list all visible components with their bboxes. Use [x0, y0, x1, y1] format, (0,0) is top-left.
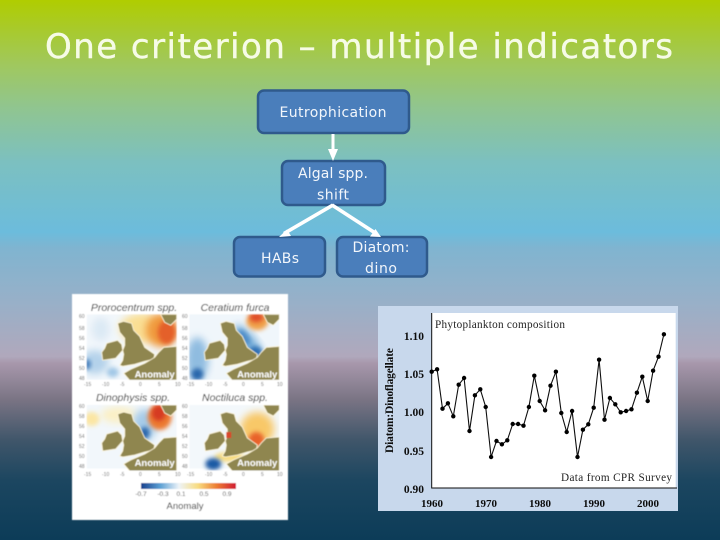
map axis labels: 0: [139, 472, 142, 478]
map titles: Ceratium furca: [201, 302, 270, 314]
box: Diatom:dino: [337, 237, 427, 277]
map axis labels: 10: [277, 472, 283, 478]
panel: anomaly maps: [72, 294, 288, 520]
map axis labels: 10: [175, 382, 181, 388]
box: Algal spp. shift: shift: [317, 188, 350, 204]
map axis labels: -15: [84, 382, 91, 388]
map axis labels: 50: [79, 454, 85, 460]
map axis labels: 54: [182, 346, 188, 352]
panel: phytoplankton line chart: [378, 306, 678, 511]
x axis ticks: 1990: [583, 498, 606, 510]
x axis ticks: [421, 498, 660, 510]
map axis labels: 56: [79, 424, 85, 430]
map axis labels: 58: [182, 326, 188, 332]
map axis labels: 50: [182, 454, 188, 460]
map axis labels: 54: [79, 346, 85, 352]
label: Anomaly: Anomaly: [135, 458, 175, 469]
map axis labels: 0: [242, 382, 245, 388]
map axis labels: 10: [175, 472, 181, 478]
y axis label: Diatom:Dinoflagellate: [384, 348, 396, 453]
title: One criterion – multiple indicators: [45, 27, 673, 67]
map axis labels: 10: [277, 382, 283, 388]
y axis ticks: 0.95: [404, 446, 424, 458]
map axis labels: 50: [182, 366, 188, 372]
map titles: Prorocentrum spp.: [91, 302, 177, 314]
map axis labels: -5: [223, 382, 228, 388]
map axis labels: -5: [120, 382, 125, 388]
colour legend: 0.9: [222, 491, 232, 498]
colour legend: 0.1: [176, 491, 186, 498]
x axis ticks: 1960: [421, 498, 444, 510]
box: HABs: [234, 237, 325, 276]
colour legend: -0.3: [157, 491, 169, 498]
arrow: Algal spp. shift to Diatom:dino: [331, 204, 381, 237]
map axis labels: 52: [79, 444, 85, 450]
map axis labels: 56: [182, 424, 188, 430]
box: Eutrophication: [258, 90, 409, 133]
map axis labels: 58: [182, 414, 188, 420]
box: Diatom:dino: dino: [365, 261, 397, 277]
map axis labels: 52: [79, 356, 85, 362]
flow diagram: [234, 90, 427, 277]
box: Algal spp. shift: [282, 161, 385, 205]
data line: [432, 334, 664, 457]
colour legend: [135, 483, 236, 512]
map axis labels: 60: [79, 314, 85, 320]
arrow: Eutrophication to Algal spp. shift: [328, 134, 338, 161]
map axis labels: 56: [182, 336, 188, 342]
map: Prorocentrum spp.: [81, 313, 178, 380]
map axis labels: 5: [261, 382, 264, 388]
map: Ceratium furca: [186, 312, 279, 381]
source note: Data from CPR Survey: [561, 472, 672, 484]
y axis ticks: [404, 331, 424, 496]
plot area: [432, 313, 676, 488]
label: Anomaly: Anomaly: [237, 458, 278, 469]
x axis ticks: 2000: [637, 498, 660, 510]
map titles: Noctiluca spp.: [202, 392, 268, 404]
map axis labels: 52: [182, 356, 188, 362]
box: Algal spp. shift: Algal spp.: [298, 166, 368, 182]
map axis labels: -15: [187, 472, 194, 478]
map axis labels: -5: [223, 472, 228, 478]
map axis labels: 48: [79, 464, 85, 470]
map: Dinophysis spp.: [84, 404, 177, 471]
map axis labels: 5: [158, 472, 161, 478]
y axis ticks: 0.90: [404, 484, 424, 496]
map axis labels: 0: [242, 472, 245, 478]
map axis labels: -15: [84, 472, 91, 478]
map axis labels: 60: [79, 404, 85, 410]
map axis labels: 50: [79, 366, 85, 372]
map axis labels: 48: [182, 376, 188, 382]
colour legend: 0.5: [199, 491, 209, 498]
map axis labels: -10: [102, 472, 109, 478]
box: HABs: HABs: [261, 251, 299, 267]
colour legend: -0.7: [135, 491, 147, 498]
map axis labels: 5: [261, 472, 264, 478]
map axis labels: 60: [182, 404, 188, 410]
box: Eutrophication: Eutrophication: [280, 105, 386, 121]
map axis labels: 54: [79, 434, 85, 440]
map axis labels: -5: [120, 472, 125, 478]
map axis labels: -10: [205, 472, 212, 478]
map titles: Dinophysis spp.: [96, 392, 170, 404]
y axis ticks: 1.10: [404, 331, 424, 343]
label: Anomaly: Anomaly: [237, 369, 278, 380]
map axis labels: -15: [187, 382, 194, 388]
map: Noctiluca spp.: [189, 405, 279, 471]
x axis ticks: 1980: [529, 498, 552, 510]
label: Anomaly: Anomaly: [135, 369, 175, 380]
map titles: [91, 302, 270, 404]
map axis labels: -10: [205, 382, 212, 388]
map axis labels: -10: [102, 382, 109, 388]
map axis labels: [79, 314, 283, 478]
box: Diatom:dino: Diatom:: [352, 240, 410, 256]
chart title: Phytoplankton composition: [435, 319, 565, 331]
map axis labels: 58: [79, 326, 85, 332]
map axis labels: 56: [79, 336, 85, 342]
map axis labels: 52: [182, 444, 188, 450]
map axis labels: 54: [182, 434, 188, 440]
map axis labels: 60: [182, 314, 188, 320]
map axis labels: 58: [79, 414, 85, 420]
map axis labels: 0: [139, 382, 142, 388]
colour legend: Anomaly: [167, 501, 204, 512]
map axis labels: 48: [182, 464, 188, 470]
y axis ticks: 1.05: [404, 369, 424, 381]
data points: [430, 332, 666, 459]
x axis ticks: 1970: [475, 498, 498, 510]
map axis labels: 48: [79, 376, 85, 382]
map axis labels: 5: [158, 382, 161, 388]
y axis ticks: 1.00: [404, 407, 424, 419]
arrow: Algal spp. shift to HABs: [279, 204, 334, 237]
